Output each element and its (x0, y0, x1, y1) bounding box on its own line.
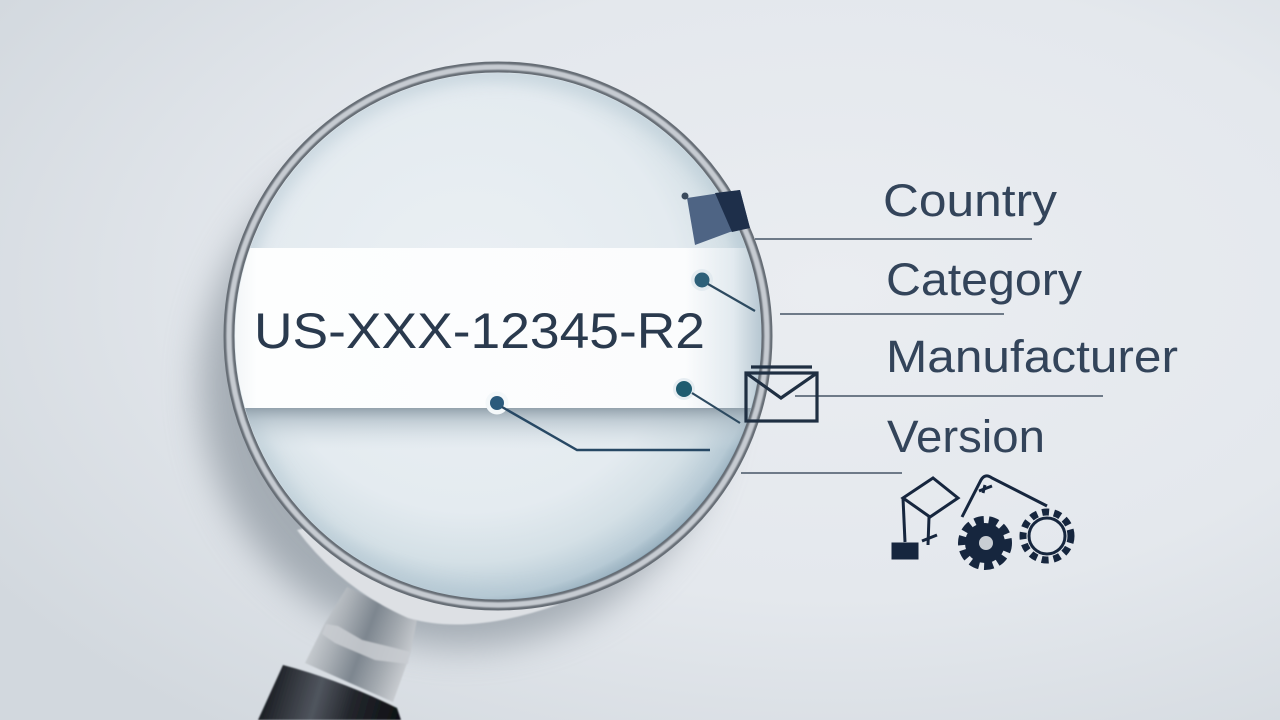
icon: flag (682, 190, 750, 245)
band shadow (245, 408, 751, 438)
connector: manufacturer (673, 378, 740, 423)
leader line: version (741, 472, 902, 474)
label: country: Country (883, 175, 1058, 226)
label: category: Category (886, 254, 1083, 305)
handle grip (258, 665, 401, 720)
metal ring (229, 67, 767, 605)
icon: outline gear (1023, 512, 1071, 560)
label band (225, 248, 760, 408)
magnifying glass (200, 67, 775, 720)
icon: arm (962, 476, 1047, 517)
lens edge tint (234, 72, 762, 600)
handle (258, 587, 417, 720)
leader line: manufacturer (795, 395, 1103, 397)
ring outer tone (229, 67, 767, 605)
leader line: category (780, 313, 1004, 315)
part number: US-XXX-12345-R2 (254, 303, 705, 359)
label: manufacturer: Manufacturer (886, 331, 1178, 382)
icon: envelope (746, 367, 817, 421)
label: version: Version (887, 411, 1045, 462)
icon: solid gear (962, 520, 1008, 566)
lower bevel (297, 528, 560, 624)
handle neck (305, 587, 417, 702)
lens (232, 70, 764, 602)
glass shadow (200, 123, 724, 647)
lens contents (225, 72, 775, 600)
icon: box diagram (893, 478, 958, 558)
connector: category (691, 269, 755, 311)
leader line: country (755, 238, 1032, 240)
connector: version (486, 392, 710, 450)
icon: box and gears (893, 476, 1071, 566)
ring highlight (229, 67, 767, 605)
handle collar (322, 624, 410, 664)
